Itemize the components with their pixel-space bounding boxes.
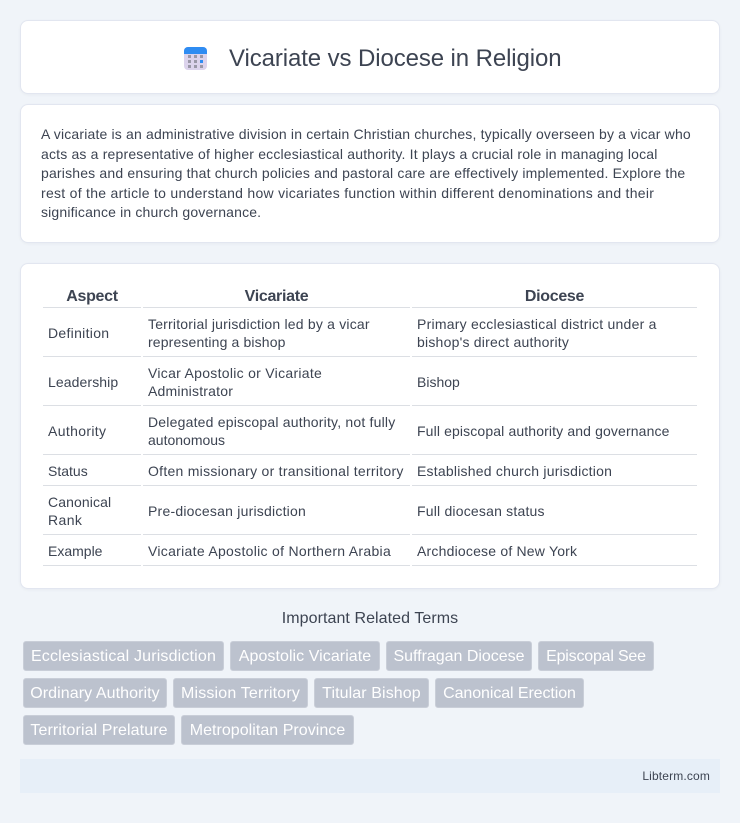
row: example: Vicariate Apostolic of Northern Arabia — [148, 543, 391, 559]
row: status: Status — [48, 463, 88, 479]
row: definition — [48, 316, 657, 350]
tag — [314, 678, 429, 708]
header panel — [20, 20, 720, 94]
row: leadership: Bishop — [417, 374, 460, 390]
row: definition: Definition — [48, 325, 109, 341]
row: definition: Territorial jurisdiction led by a vicar — [148, 316, 370, 332]
table header — [66, 288, 584, 305]
footer bar — [20, 759, 720, 793]
comparison table panel — [20, 263, 720, 589]
tag: Suffragan Diocese — [393, 648, 524, 665]
tag — [173, 678, 308, 708]
tag — [538, 641, 654, 671]
row: authority: Full episcopal authority and governance — [417, 423, 670, 439]
title: Vicariate vs Diocese in Religion — [229, 45, 562, 72]
icon: calendar — [184, 47, 207, 70]
intro paragraph: acts as a representative of higher ecclesiastical authority. It plays a crucial role in managing local — [41, 146, 658, 162]
tag: Ecclesiastical Jurisdiction — [31, 648, 216, 665]
row: canonical rank: Canonical — [48, 494, 111, 510]
intro paragraph: rest of the article to understand how vicariates function within different denominations and their — [41, 184, 654, 200]
intro text panel — [20, 104, 720, 243]
tag — [230, 641, 380, 671]
related terms tags — [23, 641, 654, 745]
tag — [23, 715, 175, 745]
row: definition: representing a bishop — [148, 334, 286, 350]
row: leadership: Administrator — [148, 383, 233, 399]
tag: Mission Territory — [181, 685, 300, 702]
row: leadership: Vicar Apostolic or Vicariate — [148, 365, 322, 381]
row: status: Established church jurisdiction — [417, 463, 612, 479]
tag: Canonical Erection — [443, 685, 576, 702]
row: authority: Delegated episcopal authority, not fully — [148, 414, 395, 430]
row: example — [48, 543, 577, 559]
row: definition: bishop's direct authority — [417, 334, 569, 350]
row: leadership — [48, 365, 460, 399]
row: example: Example — [48, 543, 102, 559]
intro paragraph: A vicariate is an administrative division in certain Christian churches, typically overseen by a vicar who — [41, 126, 691, 142]
row: leadership: Leadership — [48, 374, 118, 390]
tag — [181, 715, 354, 745]
tag: Territorial Prelature — [30, 722, 168, 739]
tag — [386, 641, 532, 671]
row: authority — [48, 414, 670, 448]
comparison table — [43, 288, 697, 566]
intro paragraph: significance in church governance. — [41, 204, 261, 220]
tag — [435, 678, 584, 708]
row: canonical rank: Pre-diocesan jurisdiction — [148, 503, 306, 519]
row: status — [48, 463, 612, 479]
table header: Aspect — [66, 288, 118, 305]
tag — [23, 678, 167, 708]
intro paragraph — [41, 126, 691, 220]
row: authority: Authority — [48, 423, 106, 439]
table header: Vicariate — [245, 288, 308, 305]
tag — [23, 641, 224, 671]
tag: Episcopal See — [546, 648, 646, 665]
row: status: Often missionary or transitional territory — [148, 463, 404, 479]
tag: Titular Bishop — [322, 685, 421, 702]
row: canonical rank: Rank — [48, 512, 82, 528]
related terms heading: Important Related Terms — [282, 610, 458, 627]
intro paragraph: parishes and ensuring that church policies and pastoral care are effectively implemented. Explore the — [41, 165, 685, 181]
row: definition: Primary ecclesiastical district under a — [417, 316, 657, 332]
tag: Apostolic Vicariate — [239, 648, 371, 665]
row: canonical rank — [48, 494, 545, 528]
row: example: Archdiocese of New York — [417, 543, 577, 559]
table header: Diocese — [525, 288, 584, 305]
row: authority: autonomous — [148, 432, 225, 448]
footer credit: Libterm.com — [642, 769, 710, 783]
tag: Ordinary Authority — [30, 685, 160, 702]
row: canonical rank: Full diocesan status — [417, 503, 545, 519]
tag: Metropolitan Province — [190, 722, 345, 739]
